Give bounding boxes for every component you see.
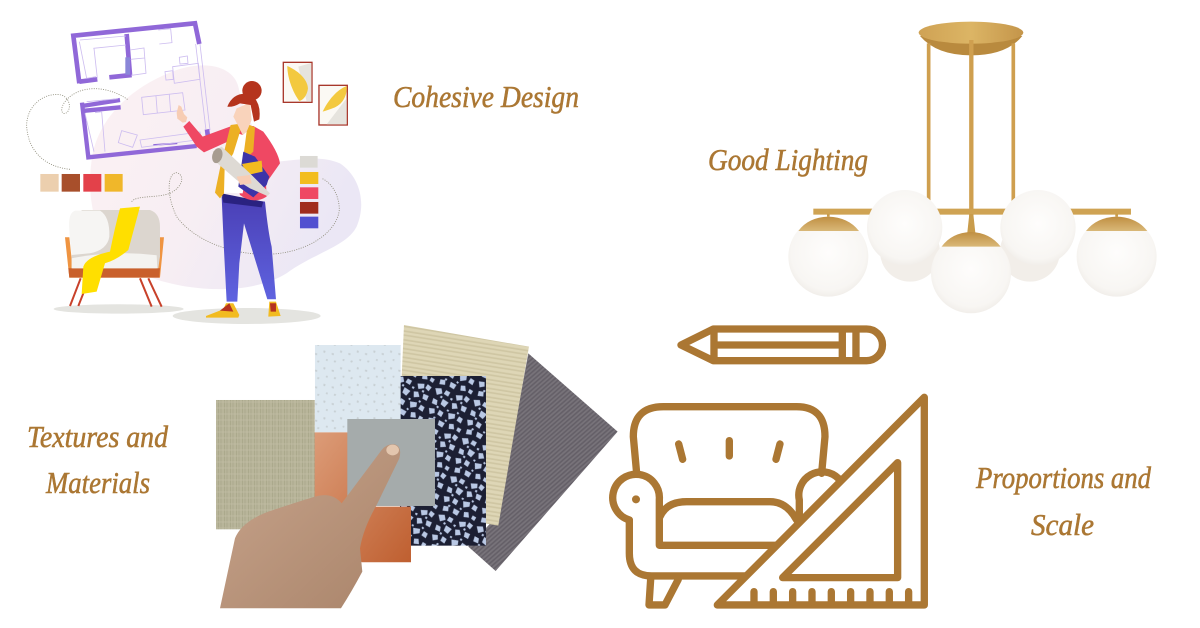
trousers [222, 197, 276, 302]
hair [227, 94, 260, 122]
icon: armchair with set square [613, 397, 924, 605]
icon: pencil [681, 329, 882, 361]
heading: Proportions and Scale: Proportions and [975, 460, 1151, 495]
illustration: designer with floor plan [27, 23, 361, 324]
raised arm [183, 121, 235, 152]
pointing hand [220, 444, 400, 608]
heading: Textures and Materials [27, 419, 168, 500]
heading: Cohesive Design: Cohesive Design [393, 79, 579, 114]
set square [717, 397, 924, 605]
dotted arrows [27, 89, 339, 254]
rods [929, 40, 1013, 237]
armchair outline [613, 407, 838, 605]
heading: Textures and Materials: Materials [45, 465, 150, 500]
terrazzo sample [400, 376, 486, 546]
wall frames [283, 62, 347, 125]
shoes [206, 302, 281, 318]
heading: Textures and Materials: Textures and [27, 419, 168, 454]
heading: Proportions and Scale [975, 460, 1151, 542]
chandelier [788, 22, 1157, 313]
grey sample [347, 419, 435, 506]
slate fabric sample [468, 353, 618, 571]
heading: Good Lighting: Good Lighting [708, 142, 868, 177]
background blob [90, 65, 361, 289]
icon: blue hatch [125, 57, 130, 75]
globe left [788, 214, 868, 297]
blouse [224, 128, 250, 193]
material samples with pointing hand [216, 325, 618, 608]
globe upper right [1000, 190, 1076, 265]
olive woven sample [216, 400, 315, 529]
colour palette [300, 156, 318, 228]
floor shadows [54, 304, 321, 324]
jacket [233, 126, 280, 200]
floor plan [73, 23, 210, 157]
orange wood sample [314, 432, 411, 562]
globe centre [931, 214, 1011, 313]
material swatches [40, 174, 123, 192]
scarf [215, 123, 255, 198]
rear globes [880, 222, 1060, 282]
pale speckled sample [315, 345, 401, 432]
heading: Proportions and Scale: Scale [1031, 507, 1094, 542]
armchair [65, 207, 164, 307]
neck and face [233, 103, 252, 135]
hand [177, 105, 187, 123]
cross bar [813, 209, 1131, 215]
globe upper left [867, 190, 942, 265]
beige sample [400, 325, 529, 526]
globe right [1077, 214, 1157, 297]
ceiling canopy [919, 22, 1023, 55]
designer figure [177, 81, 281, 318]
fan deck and book [238, 152, 269, 197]
paper roll [213, 147, 270, 196]
